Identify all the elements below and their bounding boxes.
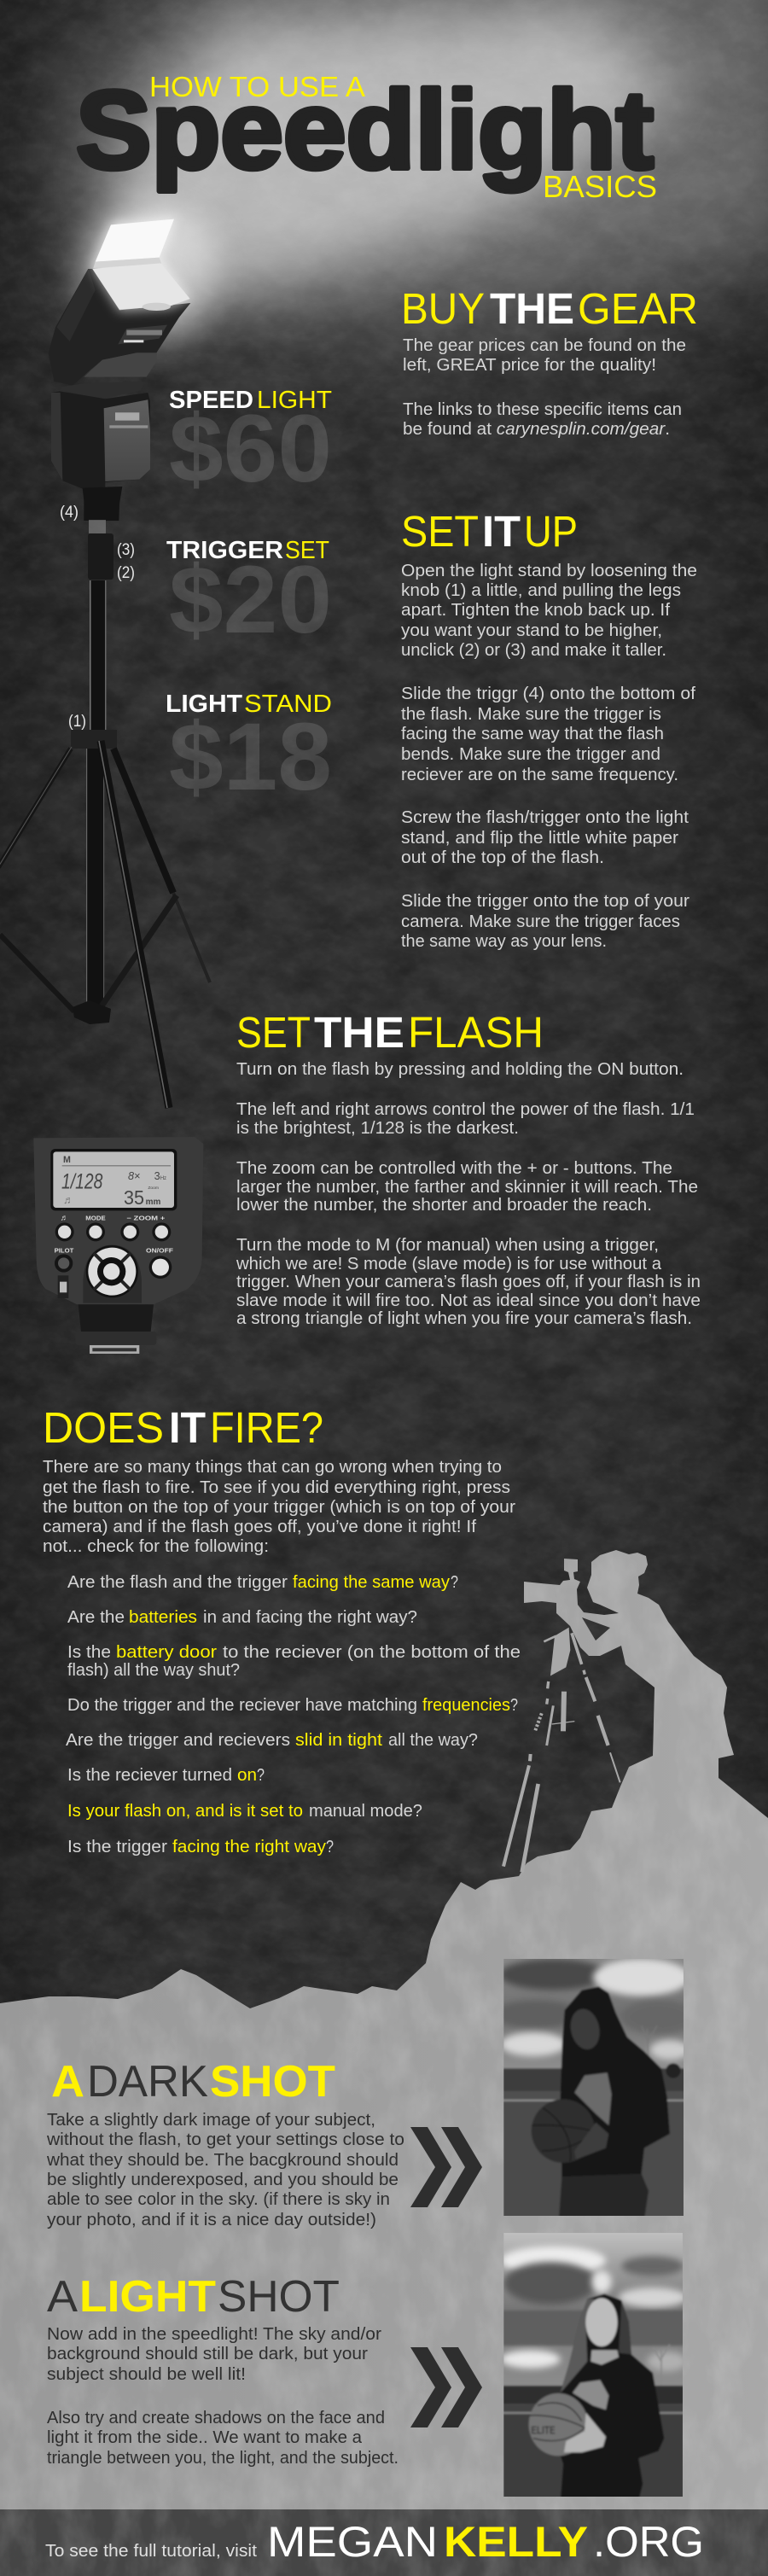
title: BASICS	[543, 169, 657, 204]
checklist: Is the reciever turned	[67, 1766, 232, 1785]
checklist: flash) all the way shut?	[67, 1661, 240, 1680]
panel: set it up: the flash. Make sure the trigger is	[401, 705, 661, 724]
checklist: Do the trigger and the reciever have matching	[67, 1696, 417, 1715]
icon: flash control panel: 3Hz	[154, 1170, 166, 1182]
panel: set the flash: Turn the mode to M (for manual) when using a trigger,	[236, 1236, 659, 1255]
panel: set the flash: which we are! S mode (slave mode) is for use without a	[236, 1255, 662, 1273]
panel: buy the gear	[401, 284, 698, 439]
panel: set it up	[401, 507, 697, 951]
panel: a light shot: background should still be dark, but your	[47, 2345, 368, 2363]
checklist: ?	[257, 1766, 265, 1785]
stand part numbers: (2)	[117, 564, 135, 582]
icon: flash control panel: M	[63, 1155, 71, 1165]
panel: a dark shot: Take a slightly dark image of your subject,	[47, 2111, 375, 2130]
prices: speedlight: $60	[169, 395, 332, 502]
footer bar: MEGAN	[267, 2518, 438, 2566]
title: Speedlight	[76, 67, 654, 192]
prices: light stand: STAND	[244, 691, 332, 718]
panel: set the flash: trigger. When your camera’s flash goes off, if your flash is in	[236, 1273, 701, 1291]
checklist: Are the flash and the trigger	[67, 1573, 288, 1592]
panel: a light shot: subject should be well lit!	[47, 2365, 246, 2384]
prices: speedlight: SPEED	[169, 387, 253, 414]
prices: light stand: $18	[169, 703, 332, 810]
panel: a light shot: light it from the side.. We want to make a	[47, 2428, 363, 2447]
checklist: slid in tight	[295, 1731, 382, 1750]
checklist: battery door	[116, 1643, 217, 1662]
panel: set the flash: slave mode it will fire too. Not as ideal since you don’t have	[236, 1291, 701, 1310]
panel: a dark shot: be slightly underexposed, and you should be	[47, 2171, 399, 2189]
icon: flash control panel: ON/OFF	[146, 1249, 174, 1255]
panel: set it up: camera. Make sure the trigger faces	[401, 912, 680, 931]
panel: a dark shot: able to see color in the sky. (if there is sky in	[47, 2190, 390, 2209]
stand part numbers: (3)	[117, 541, 135, 559]
panel: set the flash: lower the number, the shorter and broader the reach.	[236, 1196, 652, 1215]
checklist: all the way?	[388, 1731, 478, 1750]
intro paragraph: not... check for the following:	[43, 1537, 269, 1556]
photo: light shot	[499, 2228, 689, 2502]
silhouette: photographer on rock and light lower panel	[0, 1550, 768, 2514]
photo: light shot: ELITE	[531, 2425, 556, 2437]
panel: set the flash: larger the number, the farther and skinnier it will reach. The	[236, 1178, 698, 1197]
panel: set the flash: is the brightest, 1/128 is the darkest.	[236, 1119, 519, 1138]
panel: a light shot: triangle between you, the light, and the subject.	[47, 2449, 399, 2468]
panel: set it up: Screw the flash/trigger onto the light	[401, 808, 689, 827]
intro paragraph: the button on the top of your trigger (which is on top of your	[43, 1498, 515, 1517]
panel: does it fire: IT	[169, 1403, 206, 1452]
intro paragraph: camera) and if the flash goes off, you’ve done it right! If	[43, 1518, 476, 1536]
panel: set it up: you want your stand to be higher,	[401, 621, 662, 640]
checklist: manual mode?	[309, 1802, 422, 1821]
checklist: facing the same way	[293, 1573, 450, 1592]
panel: set it up: reciever are on the same frequency.	[401, 766, 678, 784]
icon: flash control panel: ♬	[63, 1194, 74, 1206]
panel: buy the gear: be found at carynesplin.com/gear .	[403, 420, 670, 439]
panel: set it up: facing the same way that the flash	[401, 725, 664, 743]
prices: speedlight: LIGHT	[257, 387, 332, 414]
panel: set it up: Slide the trigger onto the top of your	[401, 892, 689, 911]
panel: a light shot: Also try and create shadows on the face and	[47, 2409, 385, 2427]
footer bar: To see the full tutorial, visit	[45, 2542, 257, 2561]
icon: flash control panel	[33, 1137, 203, 1354]
panel: buy the gear: The links to these specific items can	[403, 400, 682, 419]
panel: a light shot	[47, 2272, 399, 2468]
panel: set it up: stand, and flip the little white paper	[401, 829, 678, 848]
intro paragraph: There are so many things that can go wrong when trying to	[43, 1458, 502, 1477]
stand part numbers	[60, 504, 135, 731]
panel: set the flash: FLASH	[408, 1008, 544, 1057]
panel: set the flash	[236, 1008, 701, 1328]
icon: speedlight flash	[49, 216, 190, 521]
icon: flash control panel: 35	[124, 1186, 144, 1209]
checklist: on	[237, 1766, 257, 1785]
prices: trigger set: $20	[169, 546, 332, 653]
panel: buy the gear: The gear prices can be found on the	[403, 336, 686, 355]
panel: set it up: bends. Make sure the trigger and	[401, 745, 660, 764]
icon: light stand	[0, 520, 210, 1108]
checklist: Are the trigger and recievers	[66, 1731, 290, 1750]
panel: set it up: UP	[524, 507, 578, 556]
checklist: ?	[510, 1696, 518, 1715]
panel: a dark shot: your photo, and if it is a nice day outside!)	[47, 2211, 376, 2229]
stand part numbers: (1)	[68, 713, 86, 731]
icon: flash control panel: 8×	[128, 1170, 140, 1182]
panel: set the flash: Turn on the flash by pressing and holding the ON button.	[236, 1060, 684, 1079]
panel: set it up: knob (1) a little, and pulling the legs	[401, 581, 681, 600]
panel: a dark shot: DARK	[87, 2057, 208, 2107]
checklist: Is your flash on, and is it set to	[67, 1802, 303, 1821]
checklist: frequencies	[422, 1696, 510, 1715]
title: HOW TO USE A	[149, 71, 365, 102]
stand part numbers: (4)	[60, 504, 79, 522]
icon: flash control panel: mm	[146, 1198, 161, 1207]
icon: flash control panel: Zoom	[148, 1186, 159, 1191]
panel: a dark shot	[46, 2057, 404, 2229]
panel: set the flash: SET	[236, 1008, 311, 1057]
panel: does it fire: DOES	[43, 1403, 164, 1452]
intro paragraph	[43, 1458, 515, 1556]
icon: flash control panel: ♬	[61, 1213, 68, 1221]
panel: a light shot: A	[47, 2272, 78, 2322]
icon: flash control panel: − ZOOM +	[126, 1215, 165, 1221]
checklist: ?	[451, 1573, 458, 1592]
checklist: in and facing the right way?	[203, 1608, 417, 1627]
footer bar	[0, 2509, 768, 2576]
panel: set the flash: The left and right arrows control the power of the flash. 1/1	[236, 1100, 695, 1119]
panel: a dark shot: what they should be. The bacgkround should	[46, 2151, 399, 2170]
panel: a light shot: SHOT	[218, 2272, 340, 2322]
panel: buy the gear: BUY	[401, 284, 485, 333]
panel: set it up: Open the light stand by loosening the	[401, 562, 697, 580]
checklist: Is the trigger	[67, 1838, 167, 1856]
icon: tripod	[503, 1628, 620, 1872]
arrow: dark shot chevrons	[410, 2127, 482, 2207]
arrow: light shot chevrons	[410, 2347, 482, 2427]
icon: flash control panel: MODE	[85, 1215, 106, 1221]
panel: buy the gear: GEAR	[578, 284, 698, 333]
panel: set it up: out of the top of the flash.	[401, 848, 604, 867]
panel: set the flash: THE	[314, 1008, 404, 1057]
panel: set the flash: a strong triangle of light when you fire your camera’s flash.	[236, 1309, 692, 1328]
panel: buy the gear: THE	[490, 284, 574, 333]
prices: trigger set: SET	[285, 537, 329, 564]
panel: does it fire	[43, 1403, 521, 1856]
checklist: to the reciever (on the bottom of the	[223, 1643, 521, 1662]
panel: does it fire: FIRE?	[210, 1403, 323, 1452]
panel: set it up: apart. Tighten the knob back up. If	[401, 601, 670, 620]
panel: a light shot: LIGHT	[79, 2272, 216, 2322]
panel: buy the gear: left, GREAT price for the quality!	[403, 356, 656, 375]
panel: set it up: IT	[482, 507, 521, 556]
panel: a dark shot: SHOT	[210, 2057, 335, 2107]
checklist: facing the right way	[172, 1838, 326, 1856]
panel: a dark shot: A	[51, 2057, 84, 2107]
panel: a dark shot: without the flash, to get your settings close to	[46, 2130, 404, 2149]
checklist	[66, 1573, 521, 1856]
checklist: Are the	[67, 1608, 125, 1627]
panel: set it up: the same way as your lens.	[401, 932, 607, 951]
panel: set it up: unclick (2) or (3) and make it taller.	[401, 641, 666, 660]
panel: set it up: Slide the triggr (4) onto the bottom of	[401, 685, 695, 703]
icon: flash control panel: 1/128	[61, 1171, 103, 1194]
icon: flash control panel: PILOT	[55, 1249, 74, 1255]
panel: a light shot: Now add in the speedlight! The sky and/or	[47, 2325, 381, 2344]
checklist: Is the	[67, 1643, 111, 1662]
footer bar: KELLY	[444, 2518, 588, 2566]
prices: light stand: LIGHT	[166, 691, 242, 718]
panel: set the flash: The zoom can be controlled with the + or - buttons. The	[236, 1159, 672, 1178]
footer bar: .ORG	[593, 2518, 704, 2566]
photo: dark shot	[503, 1959, 684, 2216]
prices: trigger set: TRIGGER	[166, 537, 283, 564]
panel: set it up: SET	[401, 507, 479, 556]
checklist: batteries	[129, 1608, 197, 1627]
checklist: ?	[326, 1838, 334, 1856]
intro paragraph: get the flash to fire. To see if you did everything right, press	[43, 1478, 510, 1497]
